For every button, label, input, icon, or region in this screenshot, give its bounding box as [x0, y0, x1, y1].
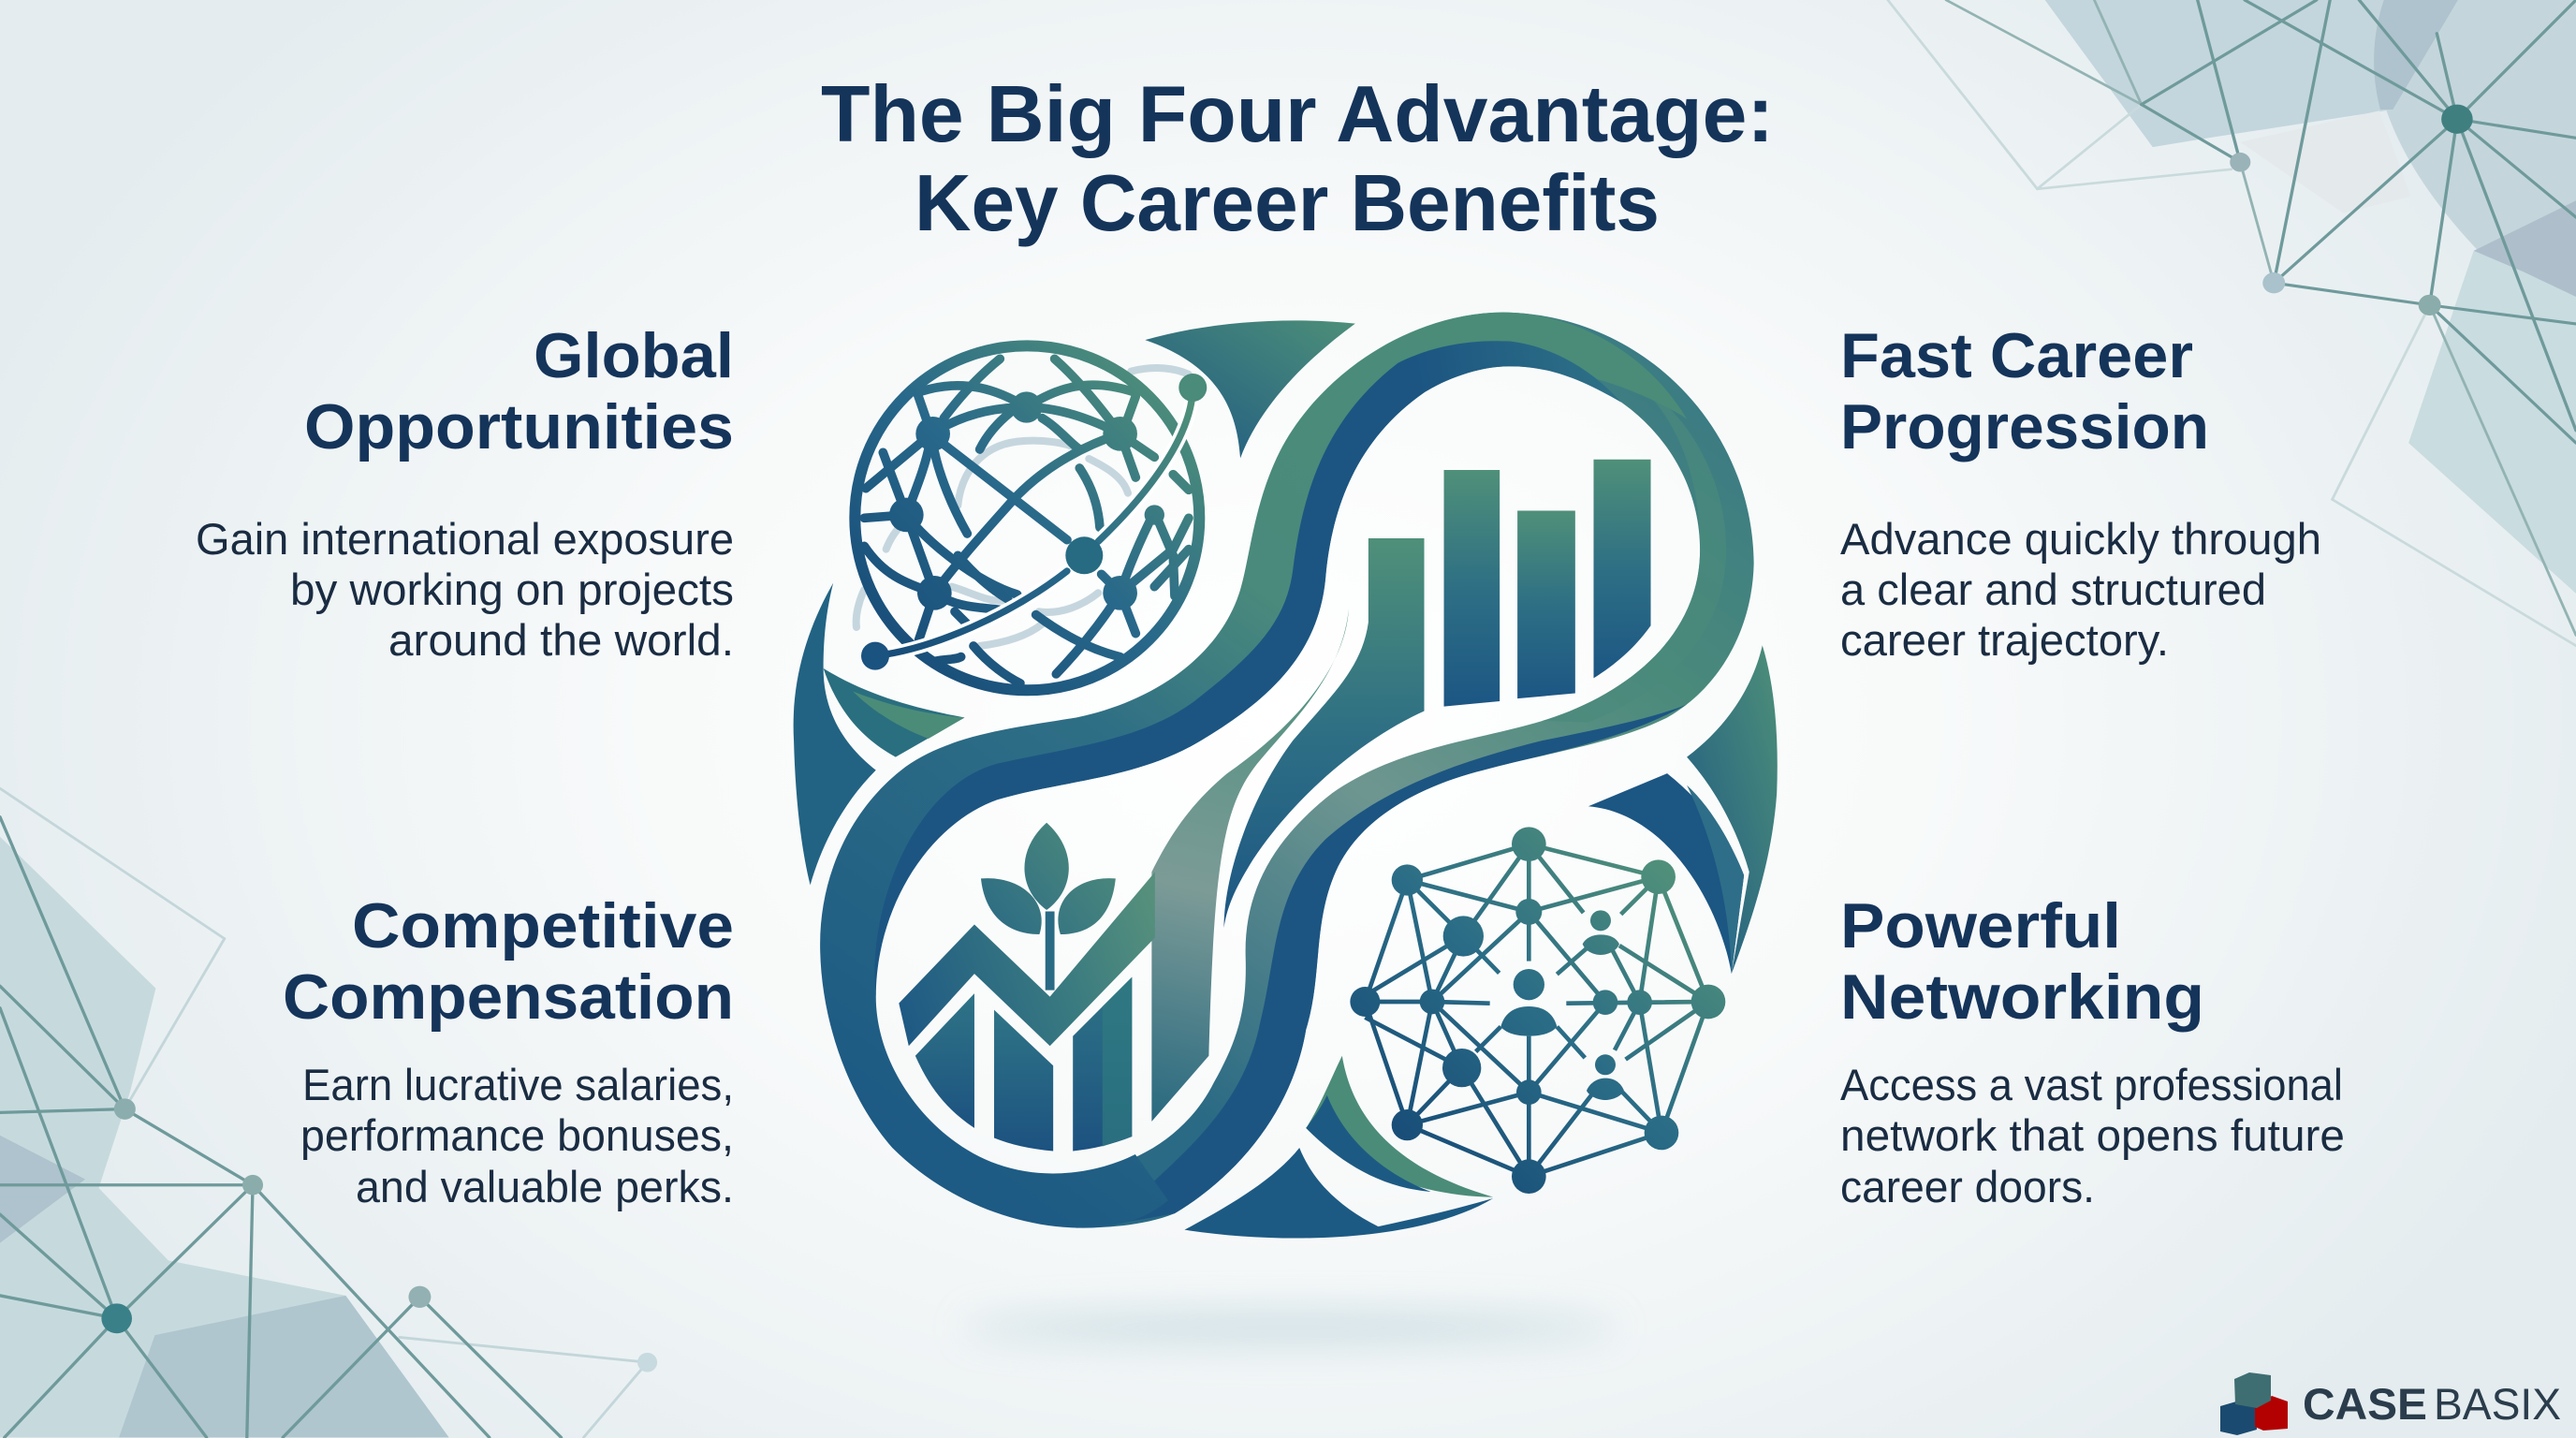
- decoration: bottom-left polygon network: [0, 788, 657, 1437]
- heading: Global Opportunities: Opportunities: [304, 391, 734, 462]
- title: The Big Four Advantage:: [821, 70, 1774, 159]
- description: Global Opportunities: [196, 514, 734, 665]
- description: Competitive Compensation: Earn lucrative salaries,: [302, 1060, 734, 1109]
- heading: Fast Career Progression: [1840, 320, 2209, 462]
- title: [821, 70, 1774, 248]
- text block: Fast Career Progression: [1840, 320, 2321, 665]
- people figures: [1500, 910, 1624, 1100]
- description: Global Opportunities: Gain international exposure: [196, 514, 734, 564]
- swoosh: bottom: [1184, 1056, 1493, 1239]
- description: Powerful Networking: [1840, 1060, 2345, 1211]
- heading: Powerful Networking: Powerful: [1840, 890, 2121, 961]
- description: Powerful Networking: career doors.: [1840, 1162, 2095, 1211]
- network icon: [1350, 827, 1725, 1194]
- text block: Powerful Networking: [1840, 890, 2345, 1211]
- text block: Competitive Compensation: [283, 890, 734, 1211]
- description: Fast Career Progression: career trajectory.: [1840, 615, 2169, 665]
- network nodes: [1350, 827, 1725, 1194]
- central emblem: [794, 313, 1778, 1239]
- emblem ground shadow: [962, 1311, 1617, 1344]
- description: Powerful Networking: network that opens future: [1840, 1110, 2345, 1160]
- logo cubes: [2220, 1372, 2288, 1435]
- heading: Powerful Networking: [1840, 890, 2204, 1033]
- description: Global Opportunities: around the world.: [388, 615, 734, 665]
- upward bars chart: [1224, 460, 1651, 928]
- band: upper-left S curve: [820, 313, 1687, 1228]
- description: Global Opportunities: by working on projects: [290, 565, 734, 614]
- text block: Global Opportunities: [196, 320, 734, 665]
- swoosh: right: [1588, 645, 1778, 974]
- heading: Competitive Compensation: [283, 890, 734, 1033]
- heading: Global Opportunities: Global: [534, 320, 734, 391]
- compensation icon: chevron, bars and plant: [899, 823, 1155, 1151]
- globe grid lines: [855, 345, 1199, 690]
- description: Fast Career Progression: [1840, 514, 2321, 665]
- decoration: top-right polygon network: [1888, 0, 2576, 646]
- description: Powerful Networking: Access a vast professional: [1840, 1060, 2343, 1109]
- logo wordmark: BASIX: [2434, 1379, 2561, 1429]
- logo wordmark: CASE: [2303, 1379, 2427, 1429]
- emblem bands and swooshes: [794, 313, 1778, 1239]
- tall sweeping bar: [1151, 609, 1349, 1122]
- heading: Powerful Networking: Networking: [1840, 961, 2204, 1033]
- description: Fast Career Progression: Advance quickly through: [1840, 514, 2321, 564]
- swoosh: top: [1145, 320, 1355, 458]
- globe pale inner ring: [856, 368, 1189, 646]
- heading: Competitive Compensation: Compensation: [283, 961, 734, 1033]
- heading: Global Opportunities: [304, 320, 734, 462]
- description: Competitive Compensation: performance bonuses,: [300, 1110, 734, 1160]
- description: Competitive Compensation: [300, 1060, 734, 1211]
- swoosh: left: [794, 583, 964, 885]
- network links: [1365, 844, 1708, 1177]
- globe icon: [855, 345, 1207, 690]
- heading: Fast Career Progression: Progression: [1840, 391, 2209, 462]
- title: Key Career Benefits: [915, 159, 1660, 248]
- globe nodes: [889, 391, 1164, 610]
- heading: Fast Career Progression: Fast Career: [1840, 320, 2193, 391]
- brand logo: CASEBASIX: [2220, 1372, 2561, 1435]
- description: Competitive Compensation: and valuable perks.: [356, 1162, 734, 1211]
- orbit line with end points: [861, 374, 1207, 670]
- heading: Competitive Compensation: Competitive: [352, 890, 734, 961]
- band: lower-right S curve: [1076, 313, 1754, 1228]
- description: Fast Career Progression: a clear and structured: [1840, 565, 2266, 614]
